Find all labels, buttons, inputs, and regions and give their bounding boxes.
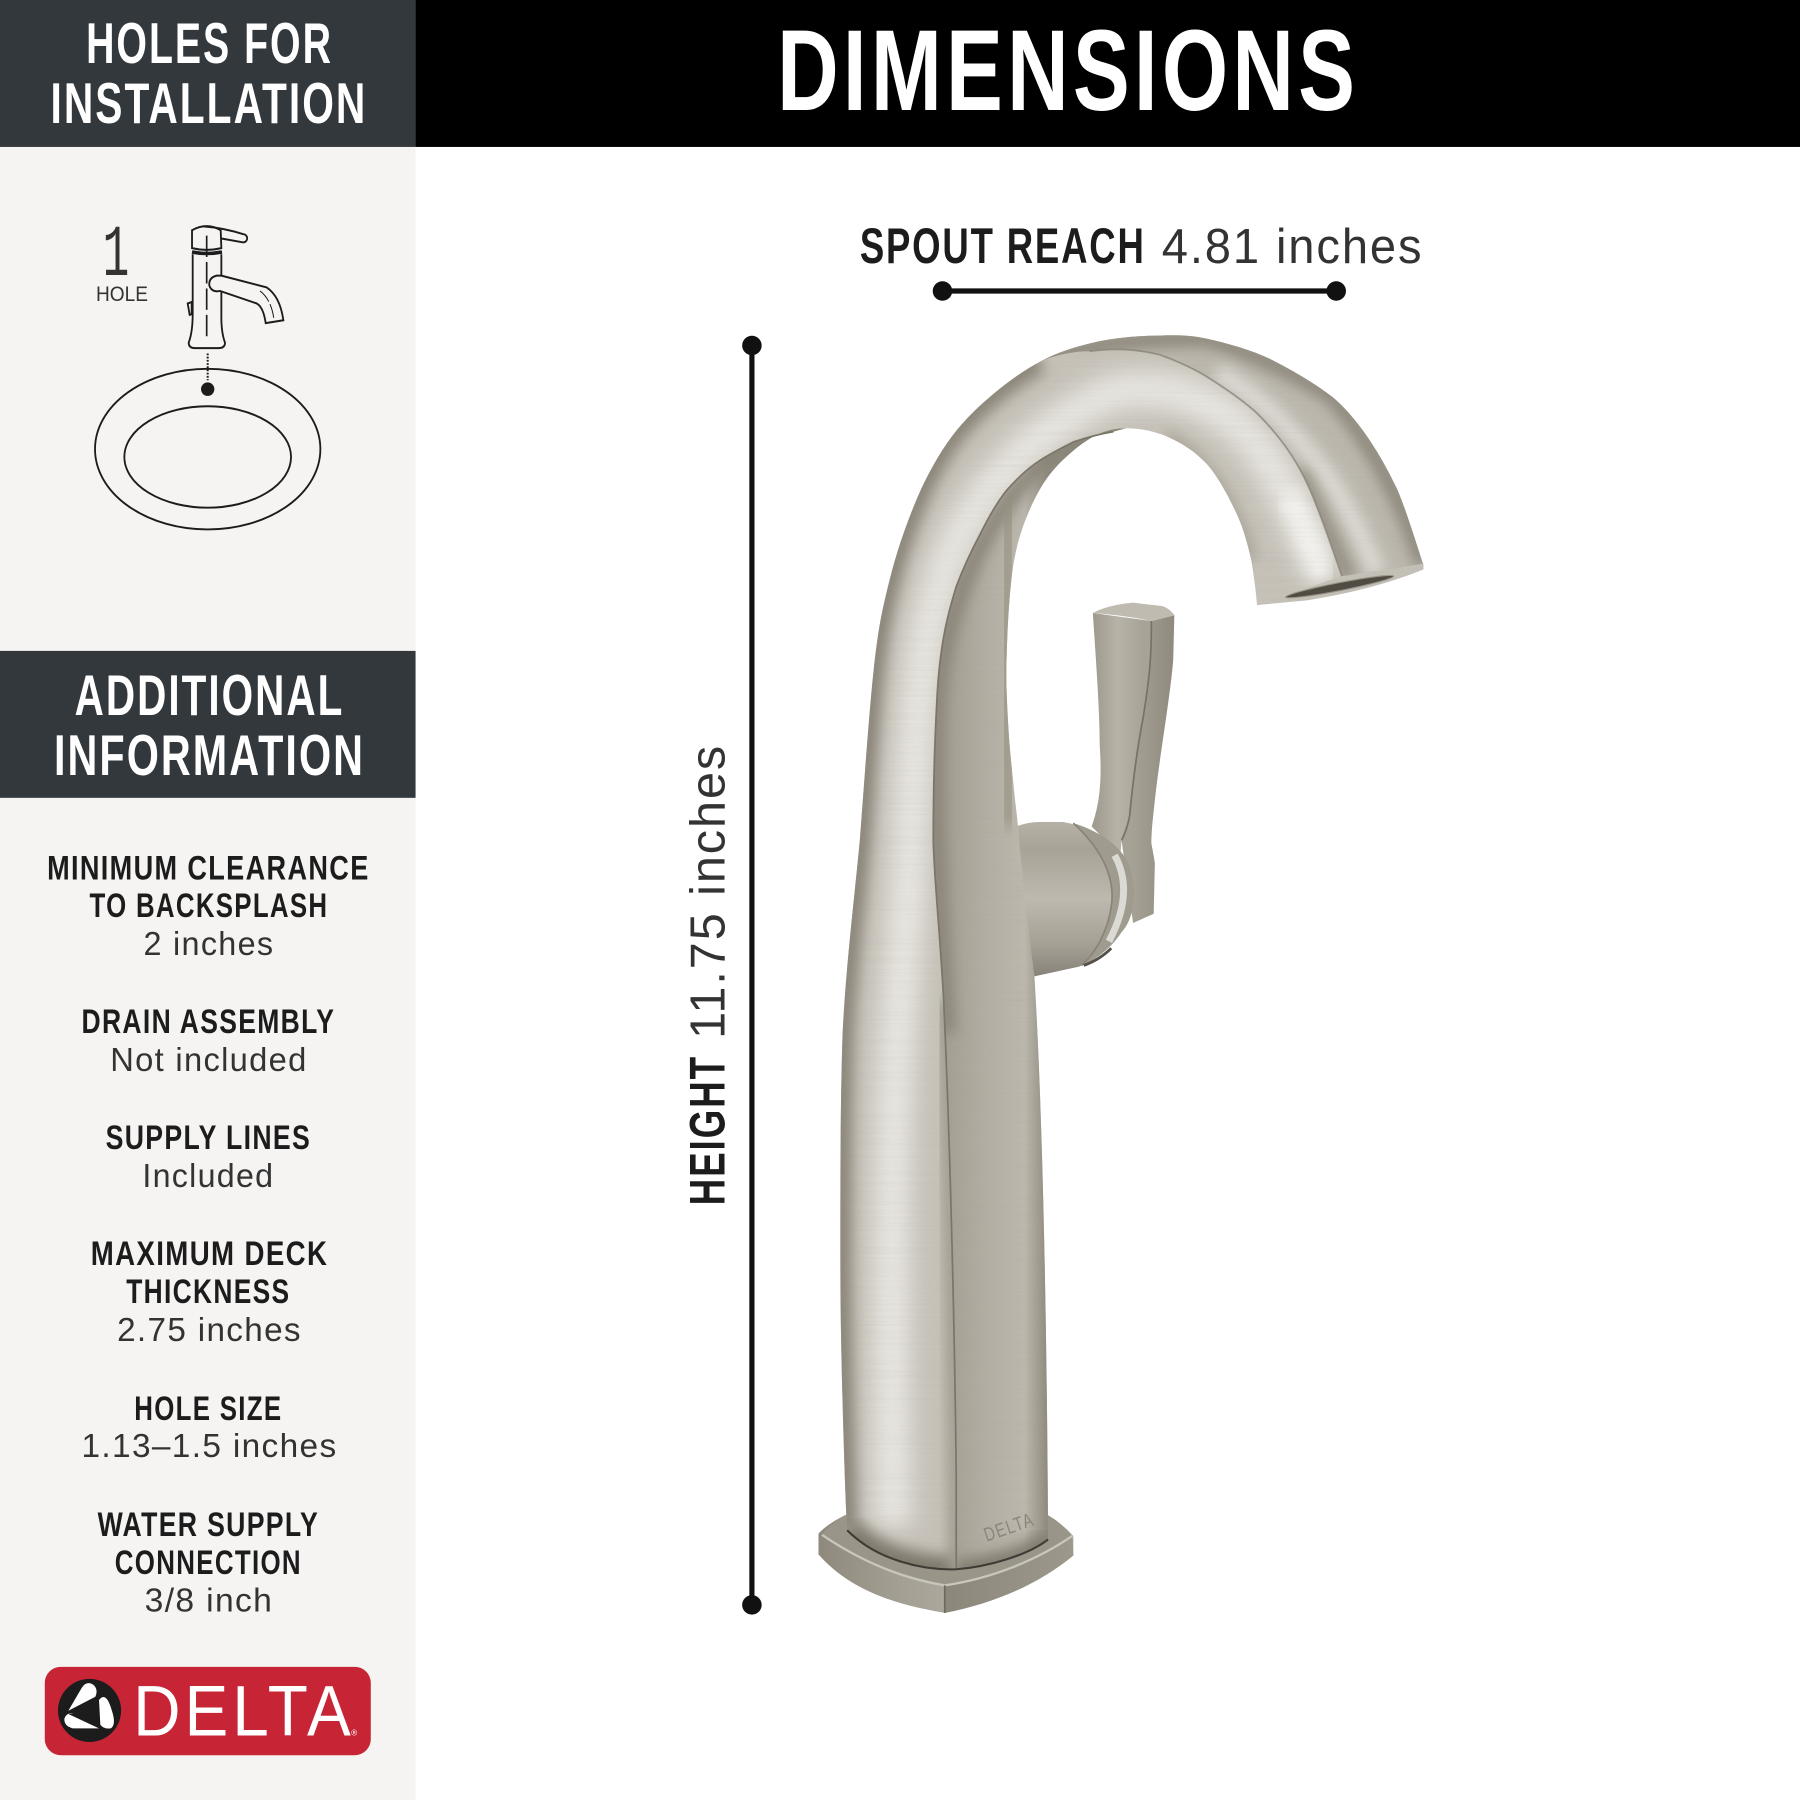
title bar: dimensions (416, 0, 1800, 147)
dimension: height (678, 336, 762, 1615)
faucet DELTA engraving: DELTA (981, 1509, 1037, 1546)
text block: minimum clearance: MINIMUM CLEARANCE (47, 849, 370, 887)
text block: hole size (82, 1390, 338, 1465)
body bottom shadow line (847, 1530, 1048, 1569)
text block: maximum deck thickness (91, 1235, 328, 1349)
dimension: height: 11.75 inches (680, 744, 735, 1039)
heading: additional information (0, 651, 416, 798)
heading: holes for installation: HOLES FOR (86, 12, 333, 76)
text block: maximum deck thickness: MAXIMUM DECK (91, 1235, 328, 1273)
dimension: spout reach: 4.81 inches (1162, 219, 1423, 274)
panel: left sidebar (0, 0, 416, 1800)
body inner face (933, 428, 1126, 1569)
logo: Delta: DELTA (133, 1673, 355, 1752)
title bar: dimensions: DIMENSIONS (777, 7, 1359, 135)
text block: maximum deck thickness: 2.75 inches (117, 1312, 302, 1349)
faucet handle (1092, 603, 1174, 923)
faucet deck plate (818, 1515, 1073, 1613)
text block: water supply connection: CONNECTION (115, 1544, 302, 1582)
heading: additional information: ADDITIONAL (75, 664, 344, 728)
heading: additional information: INFORMATION (54, 724, 365, 788)
dimension: spout reach: SPOUT REACH (860, 217, 1146, 274)
logo: Delta: ® (351, 1729, 357, 1738)
icon: single hole faucet over sink: 1 (103, 215, 129, 298)
text block: water supply connection: 3/8 inch (145, 1583, 273, 1620)
text block: minimum clearance (47, 849, 370, 963)
faucet product image (818, 327, 1429, 1613)
spout outer face (1040, 335, 1423, 576)
aerator (1257, 564, 1423, 605)
text block: hole size: 1.13–1.5 inches (82, 1428, 338, 1465)
faucet body and spout (832, 327, 1429, 1584)
brushed metal texture (832, 327, 1429, 1584)
text block: drain assembly: Not included (110, 1042, 308, 1079)
text block: minimum clearance: 2 inches (143, 926, 274, 963)
text block: drain assembly: DRAIN ASSEMBLY (82, 1003, 335, 1041)
text block: minimum clearance: TO BACKSPLASH (90, 887, 328, 925)
text block: supply lines: SUPPLY LINES (106, 1119, 311, 1157)
text block: hole size: HOLE SIZE (134, 1390, 282, 1428)
text block: supply lines (106, 1119, 311, 1195)
text block: drain assembly (82, 1003, 335, 1079)
faucet handle hub (1016, 822, 1134, 977)
text block: water supply connection (98, 1506, 319, 1620)
logo: Delta (45, 1667, 371, 1755)
icon: single hole faucet over sink (95, 215, 320, 529)
text block: maximum deck thickness: THICKNESS (126, 1273, 290, 1311)
text block: water supply connection: WATER SUPPLY (98, 1506, 319, 1544)
text block: supply lines: Included (142, 1158, 274, 1195)
dimension: spout reach (860, 217, 1423, 301)
icon: single hole faucet over sink: HOLE (96, 282, 148, 306)
heading: holes for installation: INSTALLATION (51, 72, 367, 136)
dimension: height: HEIGHT (678, 1055, 735, 1205)
heading: holes for installation (0, 0, 416, 147)
